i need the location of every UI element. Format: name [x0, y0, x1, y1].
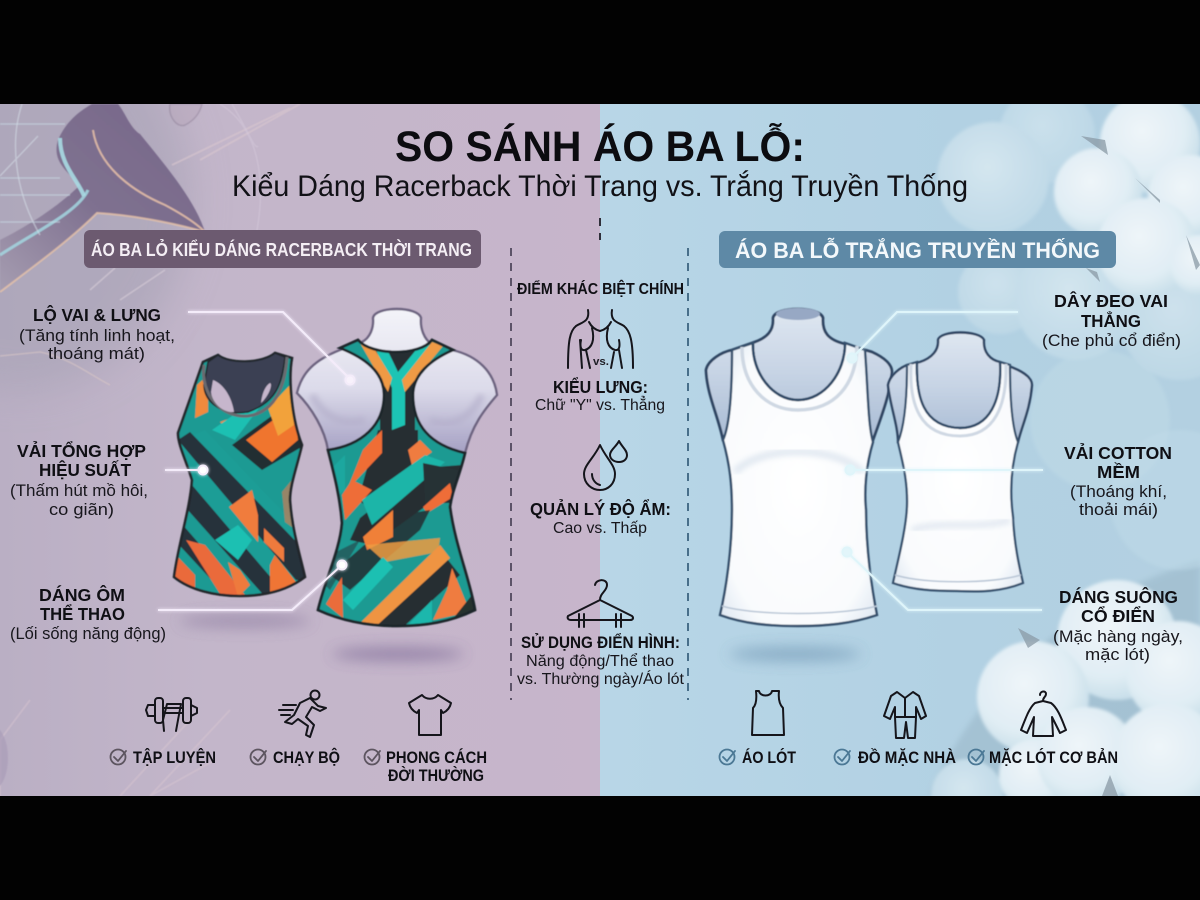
panel: left purple background [0, 104, 600, 796]
callout lines: left [158, 312, 354, 610]
left labels: fit: THỂ THAO [40, 603, 125, 624]
product: white tank back on mannequin [888, 332, 1032, 591]
text: back style: KIỂU LƯNG: [553, 376, 648, 397]
icon: undershirt [752, 691, 784, 735]
right labels: fabric: MỀM [1097, 461, 1140, 482]
left panel heading pill [84, 230, 481, 268]
right labels: fit [1053, 586, 1183, 664]
icon: long sleeve on hanger [1021, 691, 1066, 736]
mannequin [706, 309, 892, 440]
product: racerback tank front [170, 353, 311, 628]
usage: street style [364, 748, 487, 785]
usage: running [250, 748, 340, 767]
left labels: fabric: VẢI TỔNG HỢP [17, 440, 146, 461]
icon: back style comparison: vs. [593, 356, 609, 368]
usage: workout [110, 748, 216, 767]
text: typical use: SỬ DỤNG ĐIỂN HÌNH: [521, 633, 680, 652]
icon: back style comparison [568, 310, 633, 368]
right labels: straps: (Che phủ cổ điển) [1042, 331, 1181, 350]
right labels: fabric: (Thoáng khí, [1070, 482, 1167, 501]
left labels: fit [10, 584, 166, 643]
right panel heading pill [719, 231, 1116, 268]
left labels: shoulders and back: (Tăng tính linh hoạt, [19, 326, 175, 345]
callout lines: right [842, 312, 1043, 610]
usage: running: CHẠY BỘ [273, 748, 340, 767]
mannequin [297, 309, 497, 453]
icon: pajamas [884, 692, 926, 738]
right labels: fabric: VẢI COTTON [1064, 442, 1172, 463]
right labels: fabric: thoải mái) [1079, 500, 1158, 519]
left panel heading pill: ÁO BA LỎ KIỂU DÁNG RACERBACK THỜI TRANG [91, 239, 472, 260]
icon: runner [279, 690, 326, 737]
left labels: fabric: HIỆU SUẤT [39, 459, 131, 480]
product: white tank front on mannequin [706, 308, 892, 661]
text: typical use: vs. Thường ngày/Áo lót [517, 669, 685, 688]
usage: undershirt [720, 748, 796, 767]
center dashed dividers [511, 218, 688, 700]
right labels: fit: CỔ ĐIỂN [1081, 605, 1155, 626]
center column heading: ĐIỂM KHÁC BIỆT CHÍNH [517, 279, 684, 298]
text: back style [535, 376, 665, 414]
left labels: fabric: co giãn) [49, 500, 114, 519]
usage: street style: ĐỜI THƯỜNG [388, 766, 484, 785]
icon: moisture drops [584, 441, 627, 490]
right panel heading pill: ÁO BA LỖ TRẮNG TRUYỀN THỐNG [735, 237, 1100, 263]
text: moisture: QUẢN LÝ ĐỘ ẨM: [530, 498, 671, 519]
product: racerback tank back on mannequin [297, 309, 497, 661]
right labels: straps: THẲNG [1081, 310, 1141, 331]
usage: workout: TẬP LUYỆN [133, 748, 216, 767]
title [232, 122, 968, 203]
left labels: shoulders and back: thoáng mát) [48, 344, 145, 363]
icon: gym dumbbell [146, 698, 197, 731]
right labels: fit: DÁNG SUÔNG [1059, 586, 1178, 607]
mannequin [888, 332, 1032, 442]
title: SO SÁNH ÁO BA LỖ: [395, 122, 805, 171]
usage: base layer: MẶC LÓT CƠ BẢN [989, 748, 1118, 767]
usage: street style: PHONG CÁCH [386, 748, 487, 767]
title: Kiểu Dáng Racerback Thời Trang vs. Trắng Truyền Thống [232, 170, 968, 203]
usage: undershirt: ÁO LÓT [742, 748, 796, 767]
icon: t-shirt [409, 695, 451, 735]
panel: right blue background [600, 87, 1200, 831]
text: moisture [530, 498, 671, 537]
text: back style: Chữ "Y" vs. Thẳng [535, 395, 665, 414]
text: typical use [517, 633, 685, 688]
left labels: fabric: (Thấm hút mồ hôi, [10, 481, 148, 500]
left labels: fit: DÁNG ÔM [39, 584, 125, 605]
left labels: fabric [10, 440, 148, 519]
right labels: fabric [1064, 442, 1172, 519]
text: typical use: Năng động/Thể thao [526, 652, 674, 670]
right labels: straps: DÂY ĐEO VAI [1054, 290, 1168, 311]
left labels: shoulders and back: LỘ VAI & LƯNG [33, 304, 161, 325]
right labels: fit: mặc lót) [1085, 645, 1150, 664]
text: moisture: Cao vs. Thấp [553, 520, 647, 537]
left labels: fit: (Lối sống năng động) [10, 624, 166, 643]
icon: hanger [568, 580, 633, 627]
left labels: shoulders and back [19, 304, 175, 363]
right labels: fit: (Mặc hàng ngày, [1053, 627, 1183, 646]
right labels: straps [1042, 290, 1181, 350]
usage: loungewear: ĐỒ MẶC NHÀ [858, 748, 956, 767]
